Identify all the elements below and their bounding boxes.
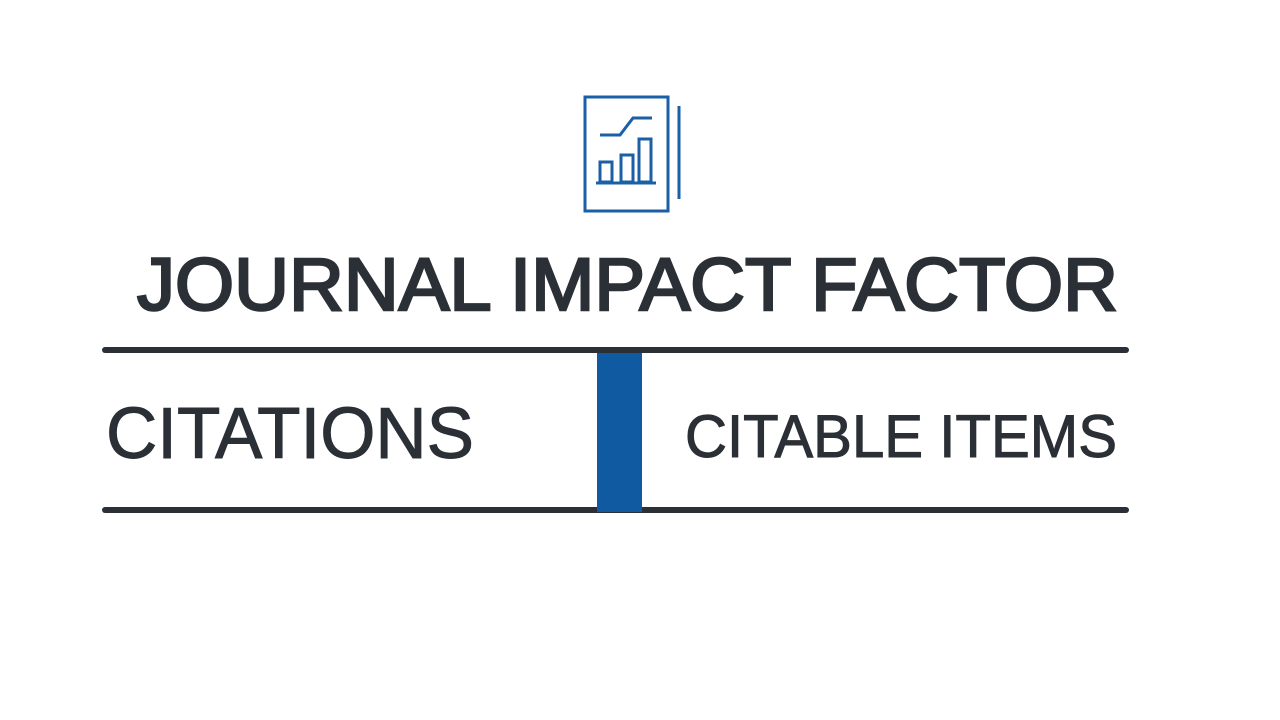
bottom rule — [105, 507, 1126, 513]
title: JOURNAL IMPACT FACTOR — [137, 243, 1118, 326]
label: citable items: CITABLE ITEMS — [685, 403, 1117, 470]
icon: report chart — [585, 97, 679, 211]
label: citations: CITATIONS — [106, 394, 474, 474]
top rule — [105, 347, 1126, 353]
divider bar — [597, 353, 642, 512]
